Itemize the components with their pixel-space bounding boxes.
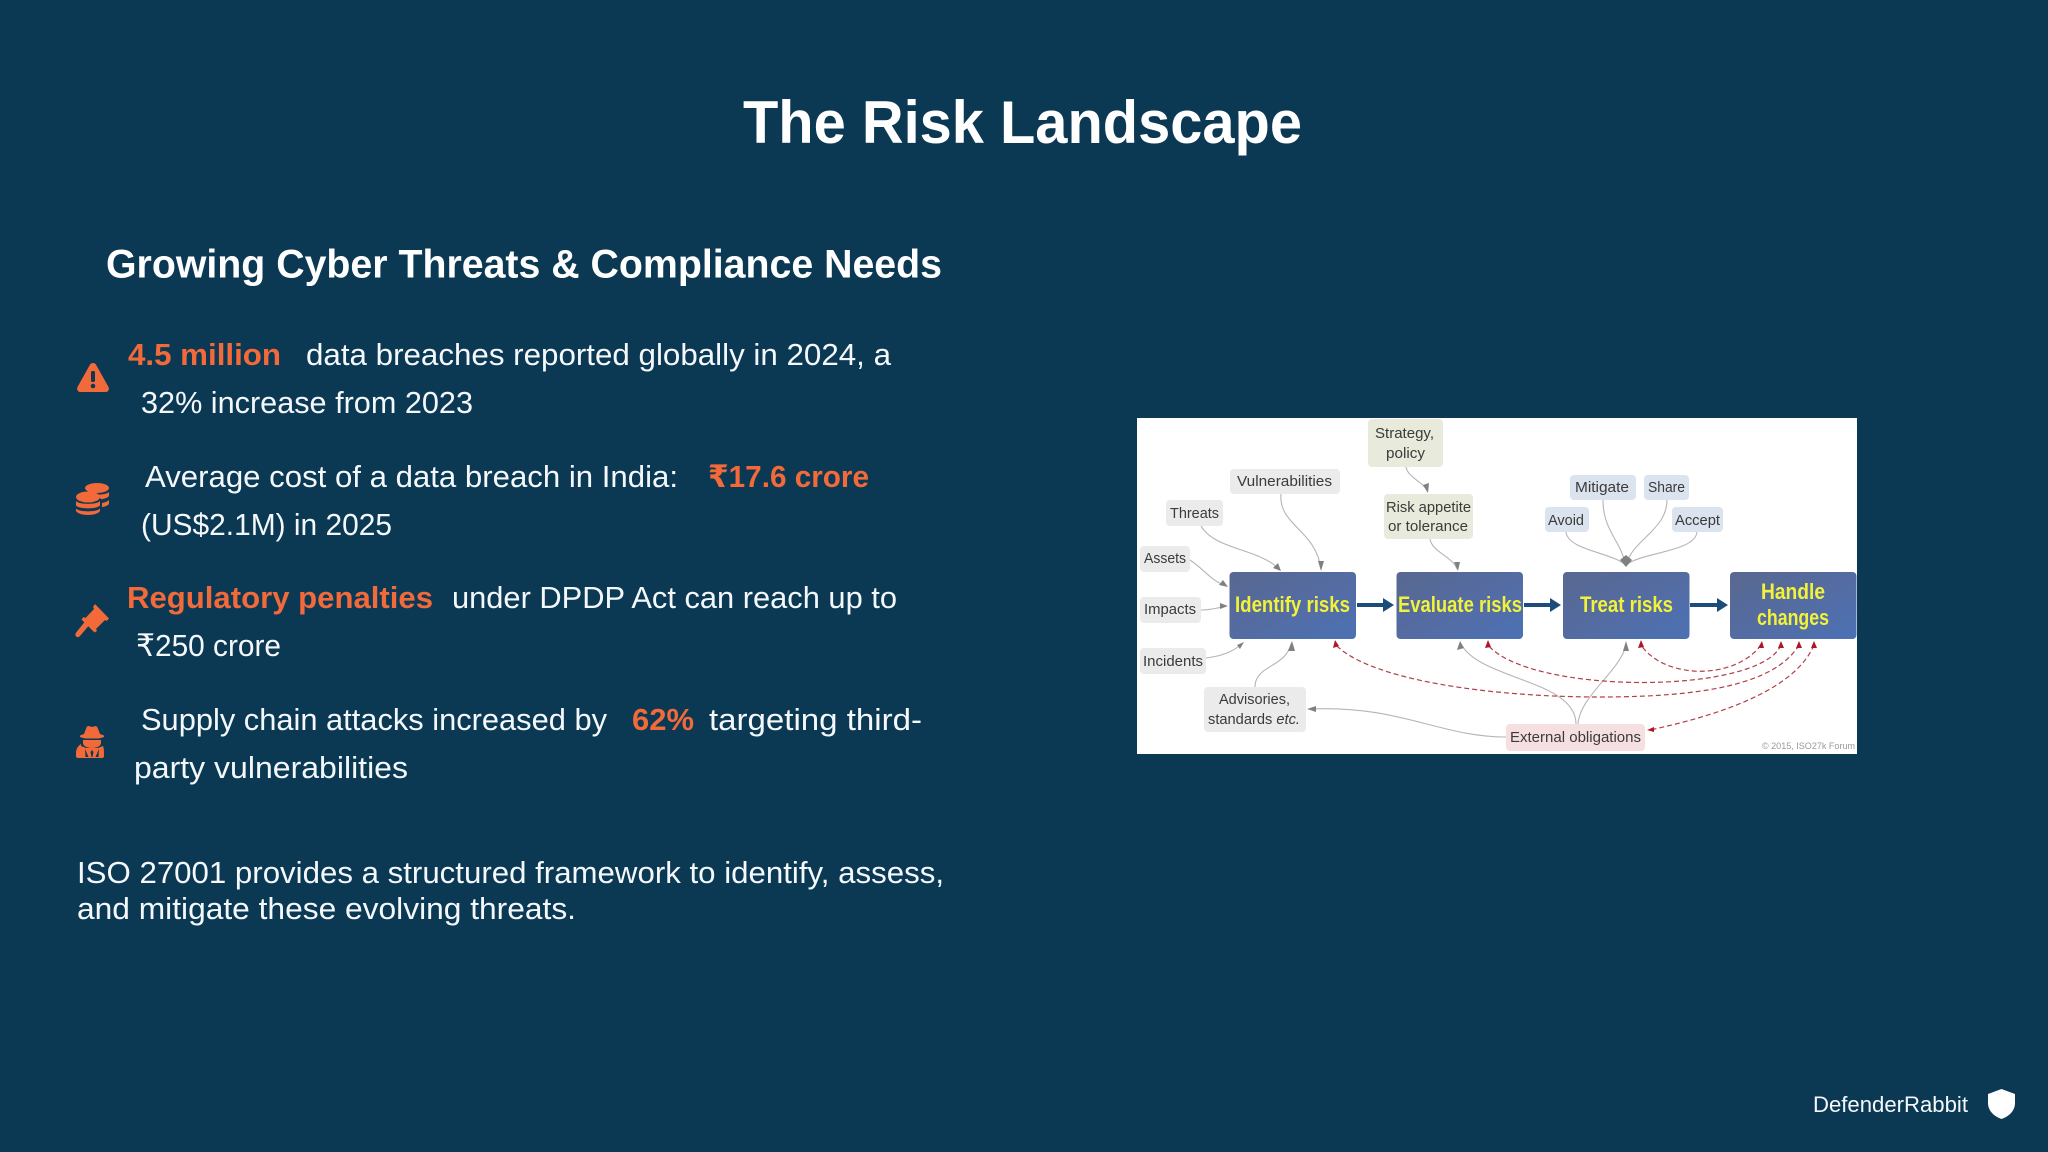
label: accept	[1672, 507, 1723, 532]
label: accept: Accept	[1675, 512, 1721, 529]
label: threats	[1166, 500, 1223, 526]
bullet text continued: (US$2.1M) in 2025	[141, 507, 392, 542]
diagram background	[1137, 418, 1857, 754]
copyright: © 2015, ISO27k Forum	[1762, 741, 1855, 752]
bullet: data breaches	[77, 337, 892, 420]
closing statement: ISO 27001 provides a structured framework to identify, assess,	[77, 855, 944, 890]
process: treat risks	[1563, 572, 1690, 639]
stat text: 62%	[632, 702, 694, 737]
process arrows	[1357, 598, 1728, 612]
label: avoid: Avoid	[1548, 512, 1584, 529]
label: advisories: standards etc.	[1208, 711, 1300, 728]
section heading: Growing Cyber Threats & Compliance Needs	[106, 242, 942, 286]
label: incidents: Incidents	[1143, 653, 1203, 670]
process: handle changes: Handle	[1761, 579, 1825, 604]
label: risk appetite: Risk appetite	[1386, 499, 1471, 516]
process: evaluate risks	[1396, 572, 1523, 639]
bullet text middle: targeting third-	[709, 702, 922, 737]
label: vulnerabilities: Vulnerabilities	[1237, 473, 1332, 490]
closing statement	[77, 855, 944, 926]
bullet text continued: 32% increase from 2023	[141, 385, 473, 420]
label: advisories: Advisories,	[1219, 691, 1290, 708]
icon: warning triangle	[77, 363, 109, 392]
process: treat risks: Treat risks	[1580, 592, 1673, 617]
bullet text continued: party vulnerabilities	[134, 750, 408, 785]
label: share: Share	[1648, 479, 1685, 496]
process: handle changes	[1730, 572, 1856, 639]
stat text: 4.5 million	[128, 337, 281, 372]
process: identify risks	[1230, 572, 1356, 639]
label: external obligations	[1506, 724, 1645, 751]
icon: shield	[1988, 1089, 2015, 1119]
label: vulnerabilities	[1230, 469, 1340, 494]
bullet text continued: ₹250 crore	[136, 628, 281, 663]
label: risk appetite: or tolerance	[1388, 518, 1468, 535]
label: strategy, policy: Strategy,	[1375, 425, 1434, 442]
brand name: DefenderRabbit	[1813, 1092, 1968, 1117]
label: mitigate: Mitigate	[1575, 479, 1629, 496]
process: handle changes: changes	[1757, 605, 1829, 630]
process: identify risks: Identify risks	[1235, 592, 1350, 617]
label: assets	[1140, 546, 1190, 572]
bullet text: Average cost of a data breach in India:	[145, 459, 678, 494]
label: strategy, policy: policy	[1386, 445, 1425, 462]
label: impacts	[1140, 597, 1201, 623]
label: avoid	[1545, 507, 1589, 532]
bullet: supply chain	[76, 702, 922, 785]
closing statement: and mitigate these evolving threats.	[77, 891, 576, 926]
label: risk appetite	[1384, 494, 1473, 539]
bullet: breach cost	[76, 459, 869, 542]
red arrowheads	[1333, 640, 1817, 732]
grey connector curves	[1190, 467, 1697, 737]
label: incidents	[1140, 648, 1206, 674]
label: impacts: Impacts	[1144, 601, 1196, 618]
diagram: ISO 27001 risk process	[1137, 418, 1857, 754]
bullet text: data breaches reported globally in 2024, a	[306, 337, 892, 372]
title: The Risk Landscape	[743, 89, 1302, 156]
red dashed feedback arrows	[1336, 645, 1814, 730]
icon: coins	[76, 483, 109, 515]
bullet text: Supply chain attacks increased by	[141, 702, 607, 737]
label: external obligations: External obligations	[1510, 729, 1641, 746]
label: share	[1644, 475, 1689, 500]
label: threats: Threats	[1170, 505, 1219, 522]
stat text: ₹17.6 crore	[708, 459, 869, 494]
bullet text: under DPDP Act can reach up to	[452, 580, 897, 615]
icon: gavel	[75, 604, 109, 637]
footer brand	[1813, 1089, 2015, 1119]
label: mitigate	[1570, 475, 1636, 500]
label: strategy, policy	[1368, 419, 1443, 467]
label: assets: Assets	[1144, 550, 1186, 567]
process: evaluate risks: Evaluate risks	[1398, 592, 1522, 617]
icon: spy	[76, 726, 104, 758]
grey arrowheads	[1219, 483, 1632, 712]
label: advisories	[1204, 687, 1306, 732]
bullet: regulatory penalties	[75, 580, 897, 663]
stat text: Regulatory penalties	[127, 580, 433, 615]
